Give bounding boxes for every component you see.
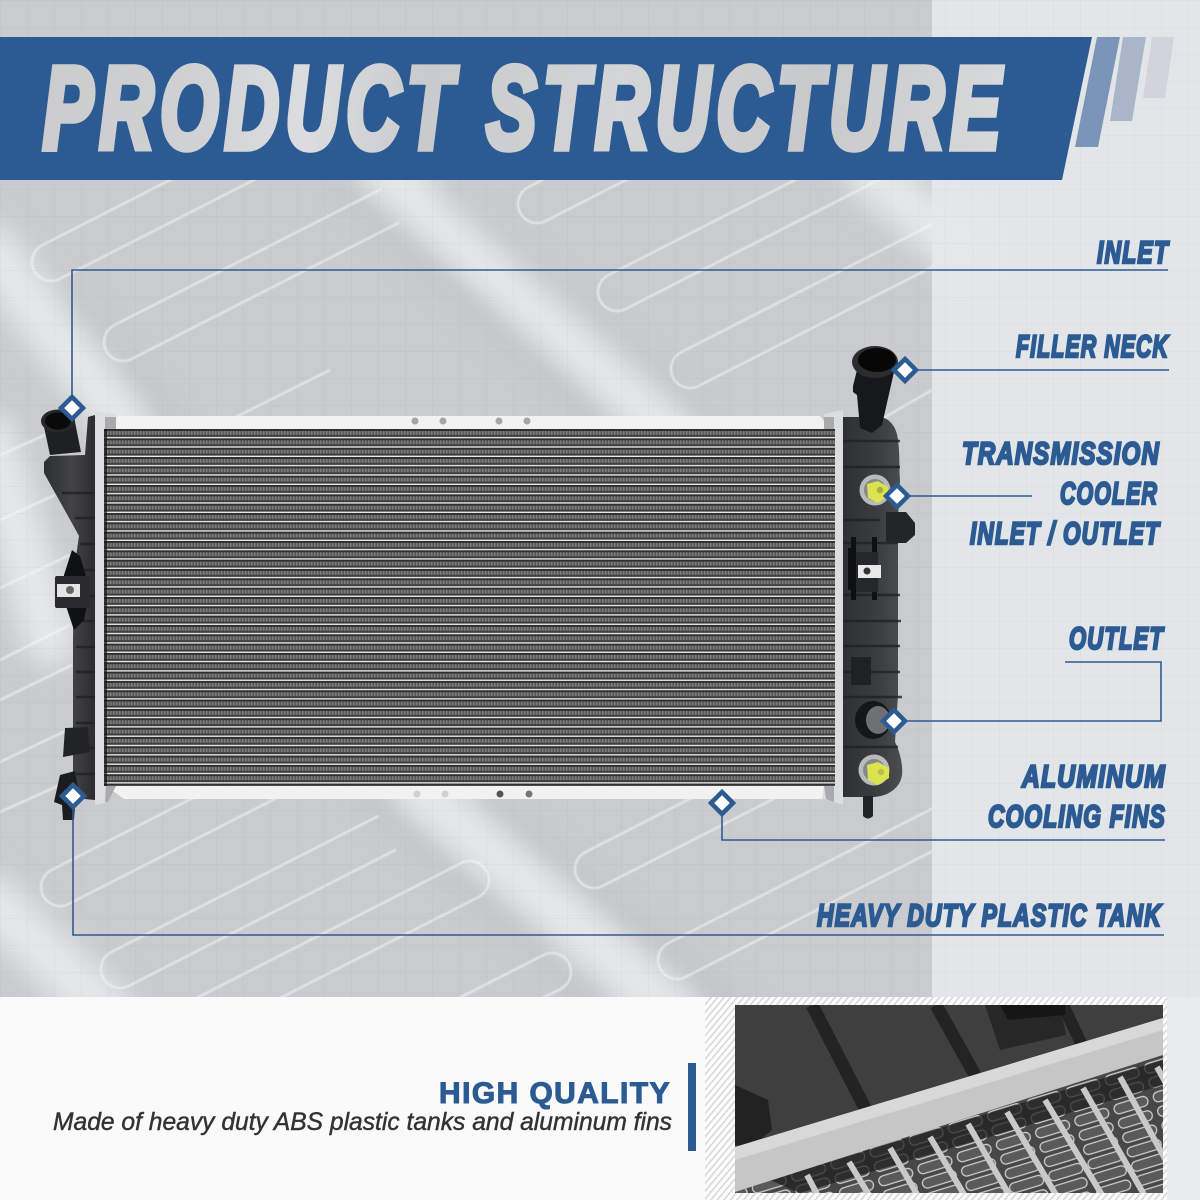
leader: inlet [61,270,1168,419]
frame holes [412,418,532,798]
label: aluminum cooling fins [988,758,1166,834]
lower cooler fitting [858,754,890,786]
outlet pipe [855,701,891,739]
bottom drain pin [863,796,873,818]
shadowed upper fin cells [770,1060,1163,1193]
bottom panel [0,997,1200,1200]
leader: transmission cooler [886,485,1032,507]
inset photo: tank and fins close-up [735,1005,1163,1193]
heading: high quality: HIGH QUALITY [439,1077,671,1110]
aluminum frame [95,410,843,805]
leader: filler neck [894,359,1169,381]
leader: heavy duty plastic tank [62,785,1164,935]
fin area [735,1055,1163,1193]
left mounting bracket [55,550,90,630]
filler neck [852,346,898,433]
transmission cooler fitting [860,474,890,506]
inlet neck [41,410,81,455]
aluminum core with fins [104,429,835,786]
left plastic tank [41,410,95,820]
leader: outlet [883,662,1161,732]
right plastic tank [843,346,915,818]
accent bar [688,1063,696,1151]
label: transmission cooler inlet / outlet [962,435,1161,551]
small clip [851,657,871,685]
right mounting bracket [848,537,881,600]
description text: Made of heavy duty ABS plastic tanks and aluminum fins [53,1108,672,1136]
black cap [886,512,915,543]
banner accent stripes [1075,37,1174,147]
tank ribs [735,1005,1082,1148]
lower clips [54,727,90,820]
tube bars [804,1066,1163,1193]
leader: aluminum cooling fins [711,792,1165,840]
radiator [41,346,915,820]
label: inlet: INLET [1097,234,1170,270]
title banner [0,37,1092,180]
silver frame band [735,1018,1163,1192]
right pale panel [932,0,1200,1000]
